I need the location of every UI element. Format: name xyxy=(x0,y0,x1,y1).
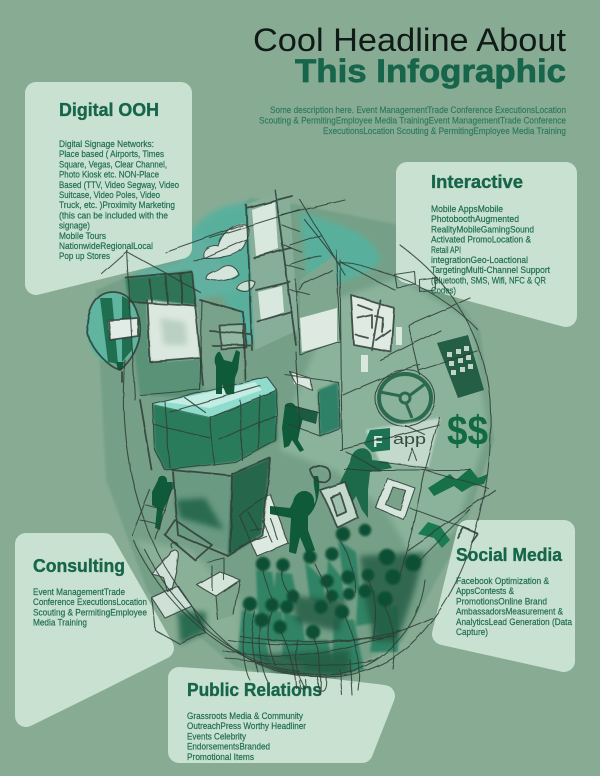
ladder xyxy=(132,490,170,540)
illustration: sketch line work xyxy=(87,190,495,695)
body text: Digital Signage Networks: xyxy=(59,139,154,150)
panel shape xyxy=(36,93,181,284)
sign outline xyxy=(210,324,250,349)
body text: AppsContests & xyxy=(456,586,515,597)
body text: Facebook Optimization & xyxy=(456,576,550,587)
body text: Retail API xyxy=(431,245,461,256)
body text: Events Celebrity xyxy=(187,731,246,742)
wheel ring xyxy=(375,370,435,426)
heading: Public Relations xyxy=(187,680,322,700)
panel: Digital OOH xyxy=(36,93,181,284)
body text: Suitcase, Video Poles, Video xyxy=(59,190,160,201)
body text: NationwideRegionalLocal xyxy=(59,241,153,252)
bowl outline xyxy=(123,245,491,677)
roof lines xyxy=(102,210,300,400)
panel shape xyxy=(407,173,566,316)
body text: Based (TTV, Video Segway, Video xyxy=(59,180,179,191)
crowd heads xyxy=(244,525,420,638)
lower-left ground xyxy=(135,540,240,650)
icon: small dark blocks xyxy=(418,522,450,548)
teal sky right xyxy=(300,212,380,284)
illustration: colour washes xyxy=(86,192,494,684)
poster marks xyxy=(351,295,394,352)
body text xyxy=(33,587,147,629)
body text xyxy=(187,711,306,763)
white figure outline xyxy=(152,542,178,592)
inner bowl arcs xyxy=(133,540,432,675)
body text: Pop up Stores xyxy=(59,251,110,262)
booth outlines xyxy=(165,458,270,560)
body text: signage) xyxy=(59,221,90,232)
body text: EndorsementsBranded xyxy=(187,742,270,753)
body text: Mobile AppsMobile xyxy=(431,204,503,215)
booth xyxy=(172,458,270,556)
description text: ExecutionsLocation Scouting & PermitingEmployee Media Training xyxy=(323,126,566,137)
icon: steering wheel xyxy=(379,374,431,422)
bus outlines xyxy=(153,377,277,470)
cabinet with teal side xyxy=(292,372,340,436)
body text: Promotional Items xyxy=(187,752,254,763)
heading: Consulting xyxy=(33,556,125,576)
panel: Consulting xyxy=(26,544,163,716)
heading: Digital OOH xyxy=(59,100,159,120)
body text: AmbassadorsMeasurement & xyxy=(456,607,564,618)
right building lines xyxy=(282,200,395,450)
walking figure xyxy=(282,403,304,452)
figure on bus holding a sign xyxy=(215,324,246,394)
heading: Social Media xyxy=(456,545,563,565)
paper icon xyxy=(320,482,358,528)
app label: app xyxy=(393,431,426,448)
body text: Codes) xyxy=(431,286,456,297)
title xyxy=(253,22,566,89)
tower lines xyxy=(246,190,296,350)
body text: Capture) xyxy=(456,627,488,638)
body text: Scouting & PermitingEmployee xyxy=(33,607,147,618)
crowd scribbles xyxy=(225,630,400,695)
body text: Activated PromoLocation & xyxy=(431,235,532,246)
body text: Media Training xyxy=(33,618,87,629)
cube outlines xyxy=(152,558,240,644)
panel: Interactive xyxy=(407,172,566,316)
body text: Grassroots Media & Community xyxy=(187,711,303,722)
body text: TargetingMulti-Channel Support xyxy=(431,265,550,276)
cubes xyxy=(152,572,240,644)
icon: tablet keypad xyxy=(437,335,484,398)
body text: Mobile Tours xyxy=(59,231,106,242)
crowd shadow xyxy=(250,552,425,682)
panel: Social Media xyxy=(443,531,573,661)
bus xyxy=(153,377,277,470)
teal sky left xyxy=(192,203,268,345)
icon: zigzag chart xyxy=(428,468,488,496)
frame outline xyxy=(376,478,415,520)
headline line 1: Cool Headline About xyxy=(253,22,566,58)
description text xyxy=(259,105,566,137)
teal patch behind screen xyxy=(130,225,240,300)
panel shape xyxy=(26,544,163,716)
clouds xyxy=(203,224,255,291)
body text: OutreachPress Worthy Headliner xyxy=(187,721,306,732)
body text: AnalyticsLead Generation (Data xyxy=(456,617,573,628)
body text: (Bluetooth, SMS, Wifi, NFC & QR xyxy=(431,275,546,286)
body text: PromotionsOnline Brand xyxy=(456,596,547,607)
panel: Public Relations xyxy=(179,678,384,763)
crowd bodies xyxy=(238,540,398,676)
billboard outlines xyxy=(126,272,245,470)
cloud outlines xyxy=(203,224,255,291)
heading: Interactive xyxy=(431,172,523,192)
poster with sketch marks xyxy=(351,295,394,352)
central figure with raised arm xyxy=(270,476,319,554)
body text xyxy=(431,204,550,297)
headline line 2: This Infographic xyxy=(295,53,566,89)
right tower block xyxy=(300,255,338,355)
billboard building xyxy=(125,270,243,398)
globe base shape xyxy=(96,198,494,684)
app panel xyxy=(366,418,440,468)
body text: Event ManagementTrade xyxy=(33,587,125,598)
body text: Truck, etc. )Proximity Marketing xyxy=(59,200,175,211)
panel shape xyxy=(443,531,564,661)
body text: (this can be included with the xyxy=(59,210,168,221)
body text: Square, Vegas, Clear Channel, xyxy=(59,159,167,170)
white figure xyxy=(152,550,178,592)
icon: hot air balloon xyxy=(86,292,140,370)
lower right facets xyxy=(340,418,495,575)
body text: PhotoboothAugmented xyxy=(431,214,519,225)
tower windows xyxy=(252,202,284,322)
document icon xyxy=(239,494,288,556)
frame icon xyxy=(376,478,415,520)
icon: F tile: F xyxy=(373,434,383,451)
crowd lines xyxy=(243,540,394,695)
lighter ground xyxy=(280,278,488,560)
icon: dollar signs: $$ xyxy=(447,407,488,454)
tower side ticks xyxy=(282,225,310,295)
body text xyxy=(59,139,179,262)
balloon outline xyxy=(87,292,140,382)
document marks xyxy=(239,494,288,556)
body text xyxy=(456,576,573,638)
body text: Place based ( Airports, Times xyxy=(59,149,164,160)
panel shape xyxy=(179,678,384,752)
body text: Photo Kiosk etc. NON-Place xyxy=(59,170,159,181)
body text: RealityMobileGamingSound xyxy=(431,224,534,235)
icon: F tile xyxy=(364,428,390,452)
social media sketch xyxy=(458,528,478,542)
body text: integrationGeo-Loactional xyxy=(431,255,528,266)
small white signs xyxy=(361,327,402,372)
upper right connector lines xyxy=(340,262,478,395)
body text: Conference ExecutionsLocation xyxy=(33,597,147,608)
climbing figure xyxy=(152,476,180,530)
cabinet outlines xyxy=(285,372,340,436)
app marks xyxy=(345,425,428,470)
paper outline xyxy=(310,466,358,528)
large figure with pointing arm xyxy=(340,448,392,518)
tower xyxy=(248,192,298,350)
